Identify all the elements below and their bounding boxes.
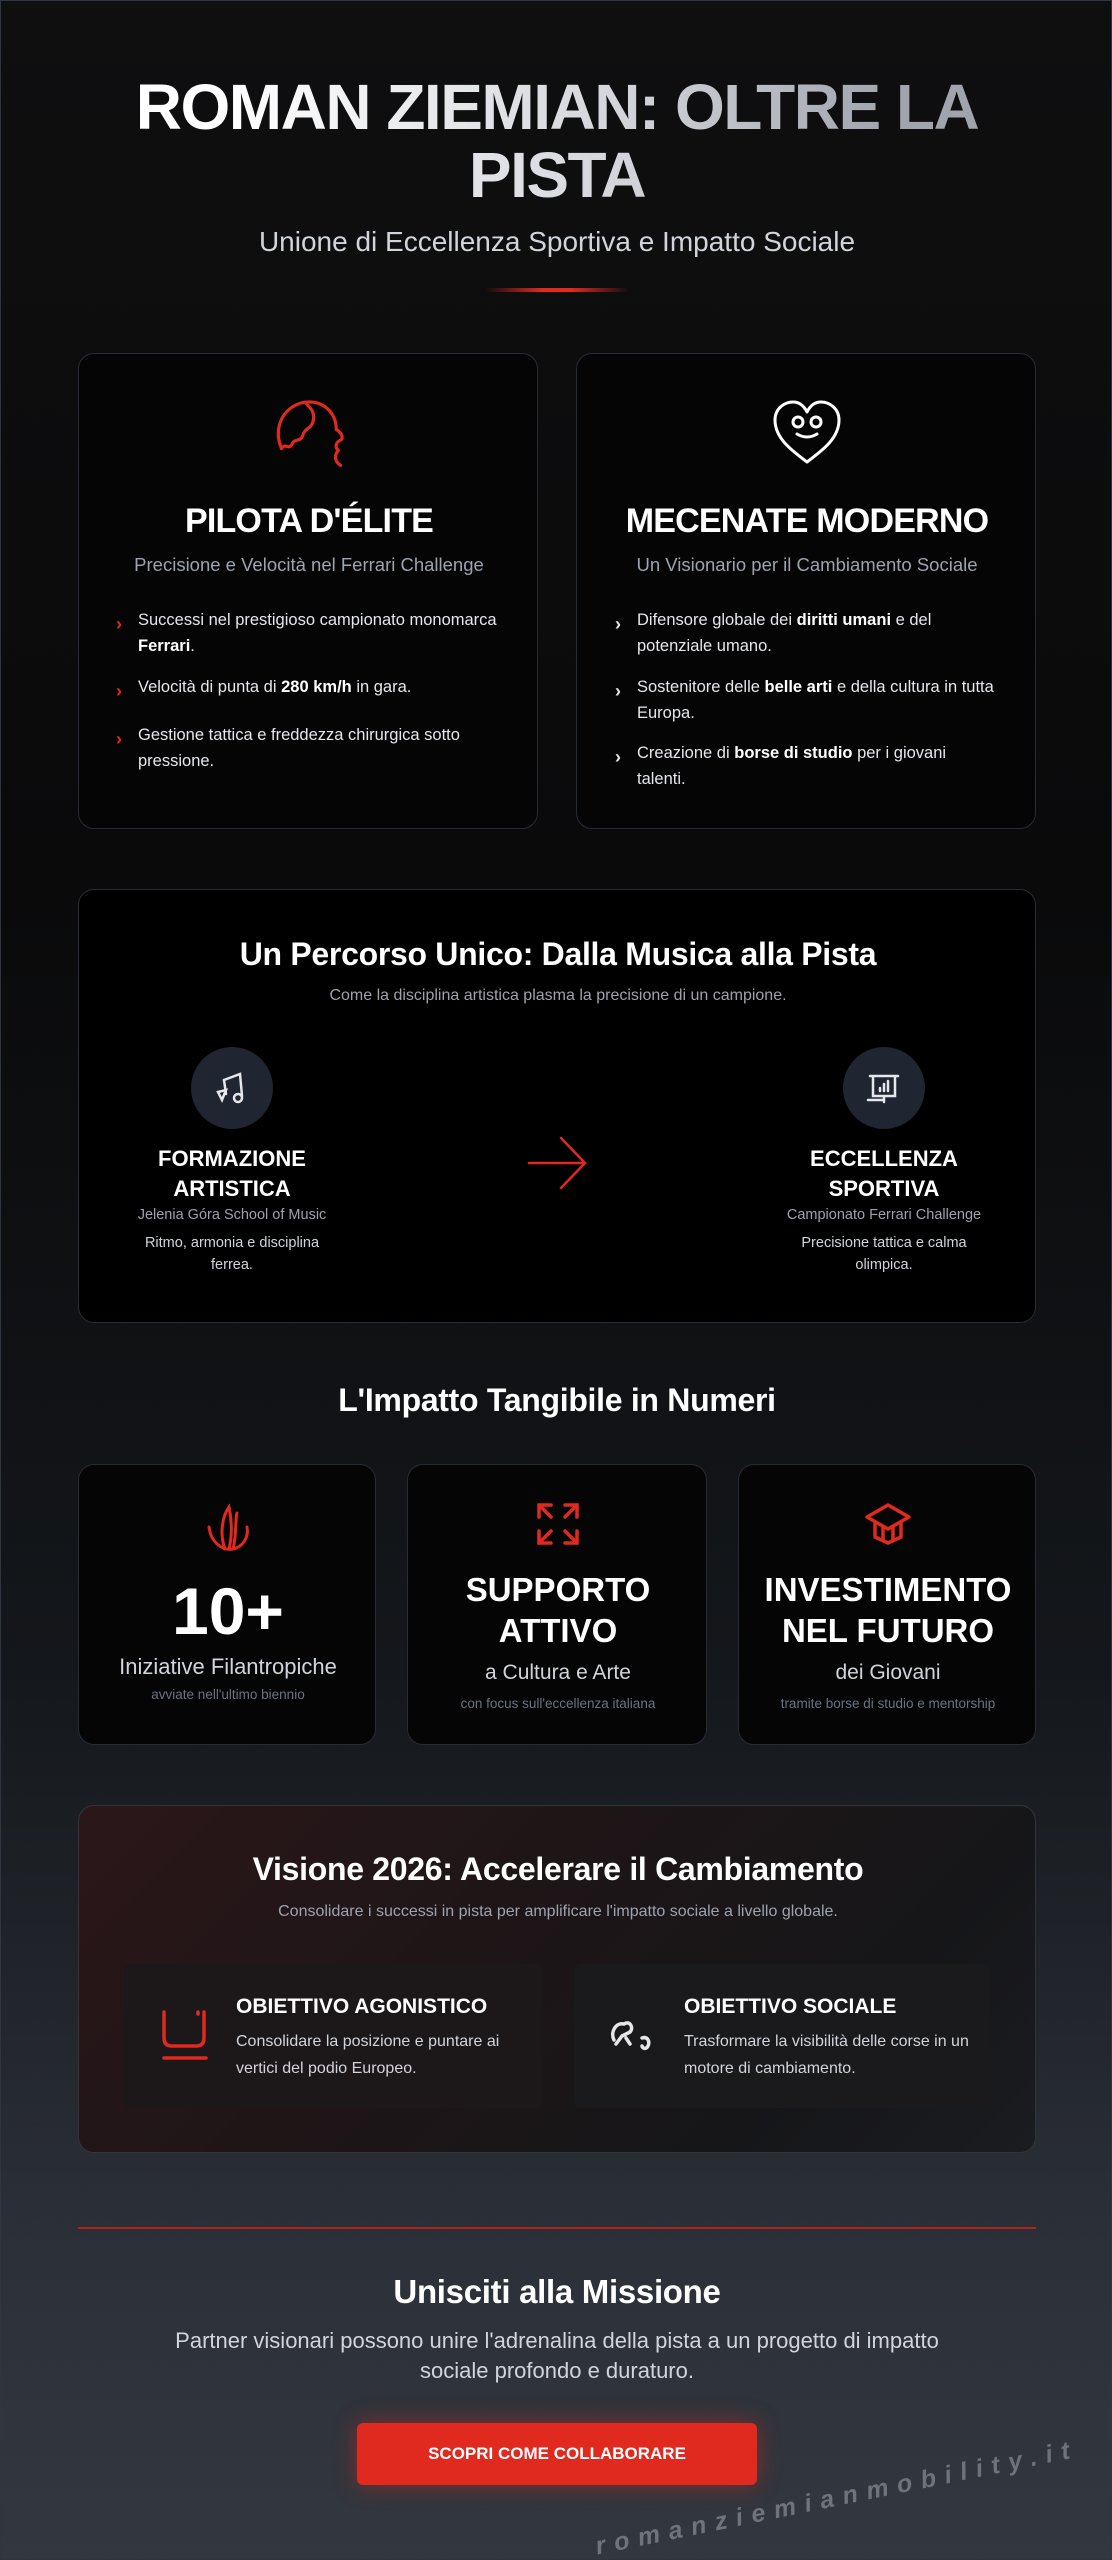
step: eccellenza: Campionato Ferrari Challenge xyxy=(787,1207,981,1223)
red divider xyxy=(78,2227,1036,2229)
icon: flame xyxy=(208,1504,249,1551)
stat card: supporto: SUPPORTO xyxy=(466,1571,650,1608)
panel: pilota: › xyxy=(116,681,122,701)
panel: percorso xyxy=(78,889,1036,1323)
icon: expand arrows xyxy=(537,1503,579,1545)
heading: MECENATE MODERNO xyxy=(626,502,988,540)
arrow xyxy=(528,1136,587,1190)
panel: pilota: › xyxy=(116,614,122,634)
heading: Un Percorso Unico: Dalla Musica alla Pista xyxy=(240,936,876,972)
title: PISTA xyxy=(469,139,645,211)
panel: visione 2026 xyxy=(78,1805,1036,2153)
stat card: investimento xyxy=(738,1464,1036,1745)
icon: helmet xyxy=(276,400,344,467)
title xyxy=(1,73,1112,209)
panel: mecenate: Creazione di borse di studio per i giovani talenti. xyxy=(637,744,946,788)
goal: sociale: OBIETTIVO SOCIALE xyxy=(684,1995,896,2018)
stat card: supporto: a Cultura e Arte xyxy=(485,1661,631,1684)
heading: PILOTA D'ÉLITE xyxy=(185,502,433,540)
goal: sociale xyxy=(574,1964,991,2108)
cta button: SCOPRI COME COLLABORARE xyxy=(428,2444,686,2463)
heading: Visione 2026: Accelerare il Cambiamento xyxy=(253,1851,863,1887)
panel: mecenate: › xyxy=(615,681,621,701)
step: eccellenza: ECCELLENZA xyxy=(810,1146,958,1171)
stat card: investimento: INVESTIMENTO xyxy=(765,1571,1011,1608)
icon: heart smile xyxy=(774,400,840,464)
step: eccellenza: Precisione tattica e calma olimpica. xyxy=(801,1235,967,1273)
icon: hands xyxy=(611,2021,651,2050)
panel: mecenate: Difensore globale dei diritti umani e del potenziale umano. xyxy=(637,611,931,655)
step: formazione: ARTISTICA xyxy=(173,1176,291,1201)
panel: pilota: Velocità di punta di 280 km/h in gara. xyxy=(138,678,411,696)
bullets xyxy=(116,611,497,770)
subtitle: Come la disciplina artistica plasma la precisione di un campione. xyxy=(329,987,787,1004)
goal: agonistico: OBIETTIVO AGONISTICO xyxy=(236,1995,487,2018)
title: ROMAN ZIEMIAN: OLTRE LA xyxy=(136,71,978,143)
panel: mecenate: › xyxy=(615,614,621,634)
goal: sociale: Trasformare la visibilità delle corse in un motore di cambiamento. xyxy=(684,2033,969,2077)
stat card: investimento: NEL FUTURO xyxy=(782,1612,994,1649)
cta text: Partner visionari possono unire l'adrenalina della pista a un progetto di impatto sociale profondo e duraturo. xyxy=(175,2328,939,2383)
panel: mecenate xyxy=(576,353,1036,829)
stat card: iniziative xyxy=(78,1464,376,1745)
step: eccellenza: SPORTIVA xyxy=(829,1176,939,1201)
watermark: romanziemianmobility.it xyxy=(593,2435,1081,2560)
goal: agonistico xyxy=(124,1964,542,2108)
step: eccellenza xyxy=(787,1047,981,1273)
icon: music xyxy=(191,1047,273,1129)
stat card: supporto: ATTIVO xyxy=(499,1612,617,1649)
icon: podium cup xyxy=(162,2010,208,2060)
step: formazione xyxy=(138,1047,326,1273)
icon: graduation cap xyxy=(865,1503,911,1545)
panel: mecenate: › xyxy=(615,747,621,767)
subtitle: Unione di Eccellenza Sportiva e Impatto Sociale xyxy=(259,226,855,257)
step: formazione: FORMAZIONE xyxy=(158,1146,306,1171)
goal: agonistico: Consolidare la posizione e puntare ai vertici del podio Europeo. xyxy=(236,2033,499,2077)
panel: mecenate: Sostenitore delle belle arti e della cultura in tutta Europa. xyxy=(637,678,994,722)
subheading: Un Visionario per il Cambiamento Sociale xyxy=(636,554,978,575)
icon: chart board xyxy=(843,1047,925,1129)
step: formazione: Jelenia Góra School of Music xyxy=(138,1207,326,1223)
stat card: supporto xyxy=(407,1464,707,1745)
stat card: iniziative: avviate nell'ultimo biennio xyxy=(151,1687,305,1702)
stat card: investimento: dei Giovani xyxy=(835,1661,941,1684)
stat card: iniziative: 10+ xyxy=(172,1574,284,1648)
subheading: Precisione e Velocità nel Ferrari Challenge xyxy=(134,554,484,575)
cta heading: Unisciti alla Missione xyxy=(393,2273,721,2310)
cta button xyxy=(357,2423,757,2485)
stat card: supporto: con focus sull'eccellenza italiana xyxy=(461,1696,655,1711)
panel: pilota xyxy=(78,353,538,829)
heading: impatto: L'Impatto Tangibile in Numeri xyxy=(338,1382,776,1418)
panel: pilota: Gestione tattica e freddezza chirurgica sotto pressione. xyxy=(138,726,460,770)
subtitle: Consolidare i successi in pista per amplificare l'impatto sociale a livello globale. xyxy=(278,1903,838,1920)
stat card: investimento: tramite borse di studio e mentorship xyxy=(781,1696,995,1711)
step: formazione: Ritmo, armonia e disciplina ferrea. xyxy=(145,1235,319,1273)
stat card: iniziative: Iniziative Filantropiche xyxy=(119,1654,337,1679)
bullets xyxy=(615,611,994,788)
panel: pilota: Successi nel prestigioso campionato monomarca Ferrari. xyxy=(138,611,497,655)
panel: pilota: › xyxy=(116,729,122,749)
red divider xyxy=(485,288,629,292)
